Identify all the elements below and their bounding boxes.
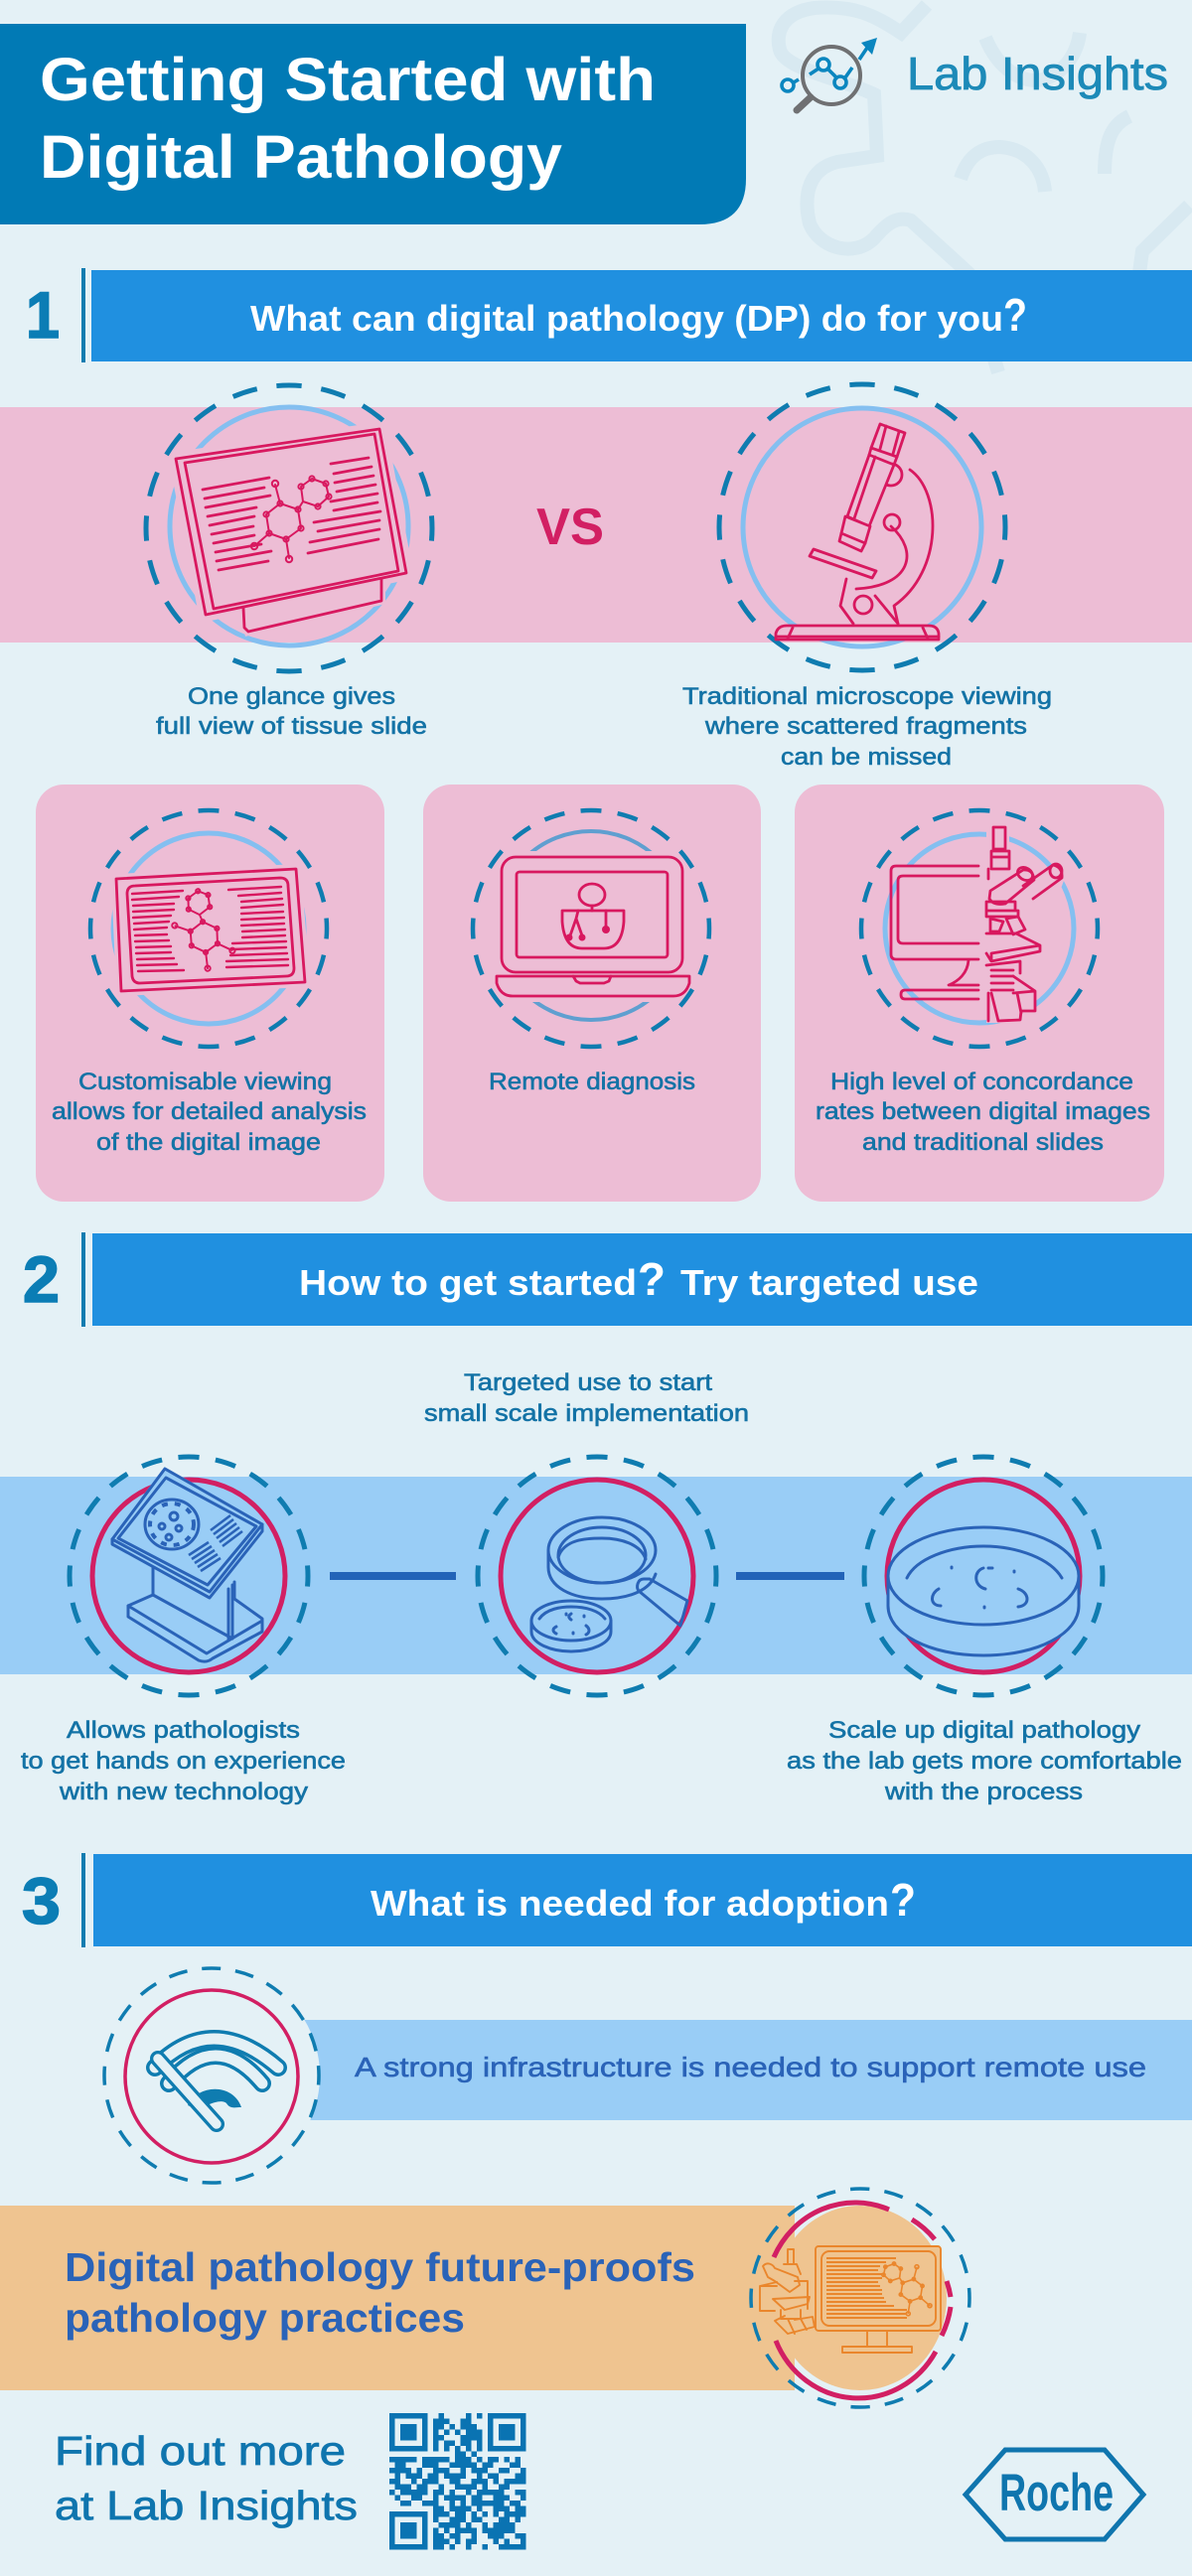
section 3 number	[22, 1853, 85, 1947]
caption: of the digital image	[96, 1129, 321, 1156]
section 2 heading bar	[92, 1233, 1192, 1326]
section 1 number: 1	[26, 278, 60, 352]
orange conclusion band: pathology practices	[65, 2295, 465, 2341]
caption: Customisable viewing	[78, 1069, 332, 1095]
caption: scale up: as the lab gets more comfortable	[787, 1748, 1182, 1775]
icon: petri dish	[864, 1457, 1103, 1695]
caption: High level of concordance	[830, 1069, 1133, 1095]
vs label: VS	[536, 499, 604, 556]
caption: traditional microscope	[682, 683, 1052, 771]
title banner	[0, 24, 746, 224]
watermark: puzzle outline	[779, 5, 1189, 372]
section 3 number: 3	[22, 1864, 61, 1937]
text: find out more: Find out more	[55, 2428, 346, 2474]
text: find out more: at Lab Insights	[55, 2483, 358, 2528]
icon: slide with molecule	[116, 869, 305, 991]
section 1 number	[26, 268, 85, 362]
logo: Roche: Roche	[999, 2464, 1114, 2522]
caption	[52, 1069, 367, 1156]
orange conclusion band: Digital pathology future-proofs	[65, 2244, 695, 2290]
section 2 heading bar: ?	[638, 1253, 666, 1305]
section 3 heading bar: ?	[890, 1874, 916, 1926]
connector: left	[330, 1572, 456, 1580]
caption	[816, 1069, 1150, 1156]
connector: right	[736, 1572, 844, 1580]
infrastructure band: A strong infrastructure is needed to support remote use	[355, 2052, 1146, 2082]
logo: Roche	[966, 2450, 1143, 2539]
section 1 heading bar	[91, 270, 1192, 361]
icon: laptop with doctor	[497, 857, 689, 996]
text: find out more	[55, 2428, 358, 2528]
caption: scale up	[787, 1717, 1182, 1805]
icon: future-proof monitor and microscope	[751, 2189, 969, 2407]
text: targeted use: small scale implementation	[424, 1400, 749, 1427]
caption: Remote diagnosis	[489, 1069, 695, 1095]
icon: half monitor half microscope	[891, 827, 1065, 1023]
logo: Lab Insights: Lab Insights	[907, 48, 1168, 99]
section 3 heading bar	[93, 1854, 1192, 1946]
panel: customisable viewing	[36, 785, 384, 1202]
section 1 heading bar: ?	[1003, 289, 1027, 341]
caption: hands on experience: to get hands on experience	[21, 1748, 346, 1775]
caption: traditional microscope: Traditional microscope viewing	[682, 683, 1052, 710]
caption: rates between digital images	[816, 1098, 1150, 1125]
icon: digital slide monitor	[146, 385, 432, 671]
qr code	[389, 2416, 526, 2547]
caption: traditional microscope: can be missed	[781, 744, 952, 771]
panel: concordance	[795, 785, 1164, 1202]
text: targeted use	[424, 1369, 749, 1427]
caption: hands on experience: Allows pathologists	[67, 1717, 300, 1744]
orange conclusion band	[0, 2206, 947, 2390]
section 2 heading bar: How to get started	[299, 1262, 637, 1303]
section 1 heading bar: What can digital pathology (DP) do for you	[250, 298, 1003, 339]
section 2 number: 2	[23, 1242, 60, 1316]
icon: microscope	[719, 384, 1005, 670]
blue band	[0, 1477, 1192, 1674]
icon: wifi	[103, 1967, 320, 2184]
infrastructure band	[298, 2020, 1192, 2120]
logo: Lab Insights	[782, 38, 1168, 110]
section 2 number	[23, 1232, 85, 1327]
caption: allows for detailed analysis	[52, 1098, 367, 1125]
icon: magnifier and dish	[478, 1457, 716, 1695]
pink comparison band	[0, 407, 1192, 643]
caption: hands on experience	[21, 1717, 346, 1805]
caption: traditional microscope: where scattered fragments	[704, 713, 1027, 740]
caption: hands on experience: with new technology	[59, 1779, 308, 1805]
icon: slide scanner kiosk	[70, 1457, 308, 1695]
caption: and traditional slides	[862, 1129, 1104, 1156]
panel: remote diagnosis	[423, 785, 761, 1202]
caption: scale up: with the process	[884, 1779, 1083, 1805]
title text: Getting Started with	[40, 46, 656, 113]
title banner: Digital Pathology	[40, 123, 562, 191]
section 3 heading bar: What is needed for adoption	[371, 1883, 889, 1924]
text: targeted use: Targeted use to start	[464, 1369, 712, 1396]
caption: one glance	[156, 683, 427, 740]
caption: scale up: Scale up digital pathology	[828, 1717, 1140, 1744]
caption: one glance: full view of tissue slide	[156, 713, 427, 740]
caption: one glance: One glance gives	[188, 683, 395, 710]
section 2 heading bar: Try targeted use	[680, 1262, 978, 1303]
